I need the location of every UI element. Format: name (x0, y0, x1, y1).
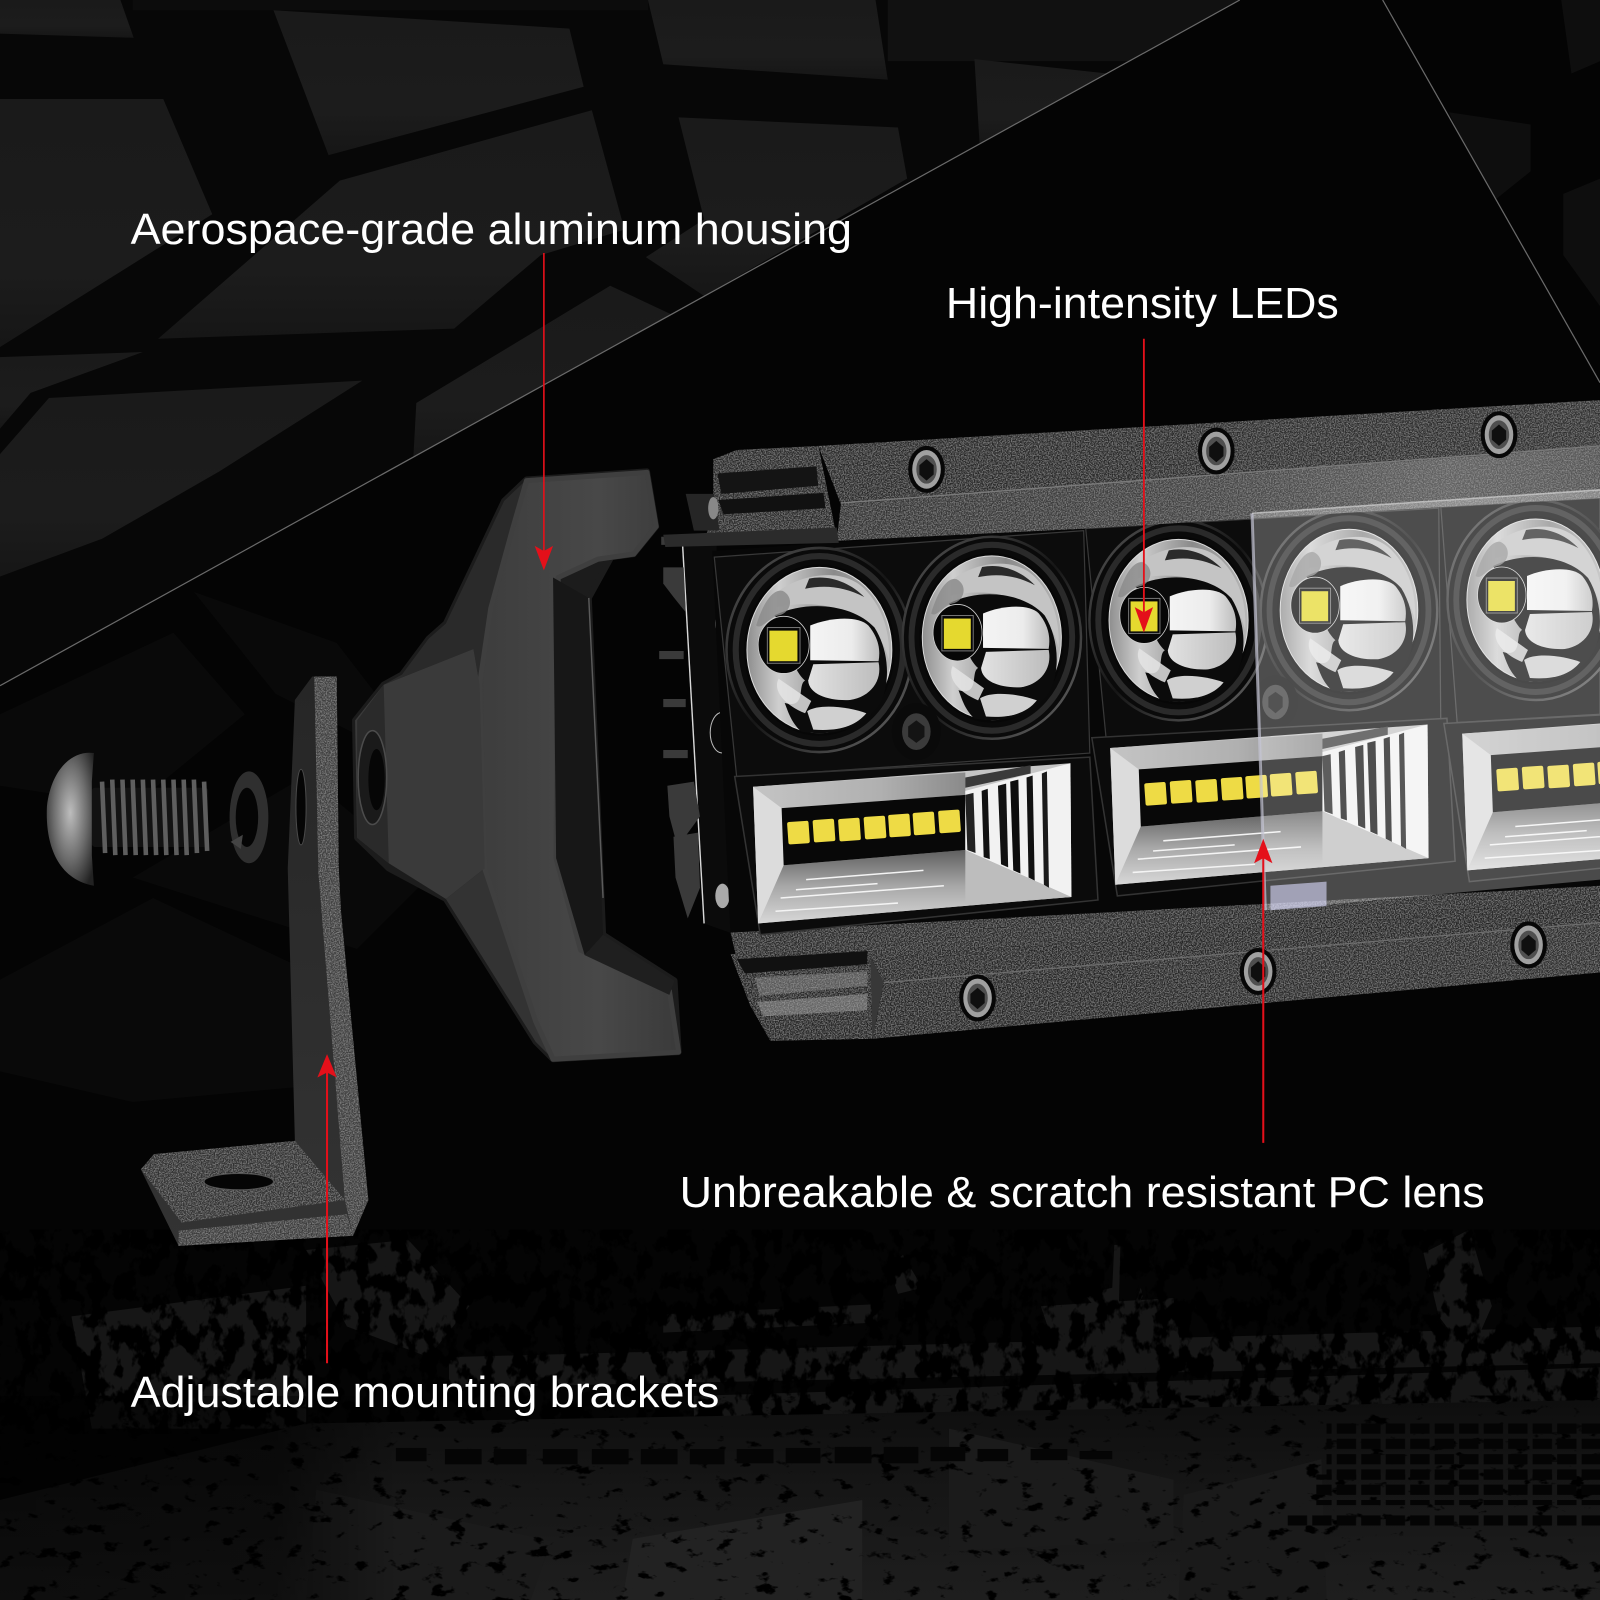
bracket holes (204, 769, 306, 1190)
spot lens 1 (727, 548, 912, 752)
label: aluminum housing: Aerospace-grade aluminum housing (131, 205, 852, 254)
upper wing (384, 480, 527, 685)
hex bolt (892, 703, 941, 760)
arrow: brackets (317, 1054, 337, 1363)
main face (480, 472, 679, 1059)
label: mounting brackets: Adjustable mounting brackets (131, 1368, 719, 1417)
transparent PC lens overlay (1252, 490, 1600, 910)
flood module 1 (735, 757, 1098, 935)
top rail screws (908, 411, 1517, 493)
side plate with fins (659, 537, 735, 934)
mounting L bracket (141, 677, 368, 1246)
hex bolt 2 (1253, 676, 1298, 729)
front panel (712, 488, 1600, 937)
LED light bar (659, 400, 1600, 1041)
spot lens 5 (1448, 500, 1600, 700)
upper module frames (714, 498, 1600, 778)
spot lens 2 (903, 537, 1081, 739)
flood module 2 (1092, 718, 1455, 896)
flood module 3 (1444, 704, 1600, 882)
bottom end block (731, 949, 873, 1041)
background: faint tread lower left (0, 592, 439, 1102)
lower wing (446, 868, 553, 1059)
arrow: LEDs (1135, 339, 1153, 633)
lower bevel (731, 886, 1600, 959)
inner dark band (553, 578, 603, 955)
lock washer (230, 771, 268, 863)
background: tire track print at bottom (0, 1230, 1600, 1600)
bottom rail (870, 898, 1600, 1039)
end cap housing (355, 471, 679, 1059)
spot lens 4 (1261, 510, 1437, 710)
tread rows at right (1286, 1423, 1600, 1530)
arrow: PC lens (1254, 839, 1272, 1143)
bolt thread (92, 780, 208, 855)
sparse scuff marks (71, 1230, 1600, 1429)
tread block row (396, 1447, 1112, 1464)
bolt head (47, 753, 94, 886)
background: faint tread upper right (1449, 0, 1600, 306)
hub (355, 649, 485, 899)
bottom rail screws (959, 921, 1547, 1021)
top end block (663, 446, 839, 547)
cap silhouette (355, 471, 679, 1059)
label: PC lens: Unbreakable & scratch resistant PC lens (680, 1168, 1485, 1217)
cap mounting hole (358, 731, 387, 824)
diagonal accent lines (0, 0, 1600, 686)
spot lens 3 (1089, 520, 1268, 720)
label: LEDs: High-intensity LEDs (946, 279, 1339, 328)
arrow: housing (535, 253, 553, 570)
background: tire tread pattern top left (0, 0, 1238, 576)
screw and lock washer (47, 753, 268, 886)
top rail (818, 400, 1600, 541)
